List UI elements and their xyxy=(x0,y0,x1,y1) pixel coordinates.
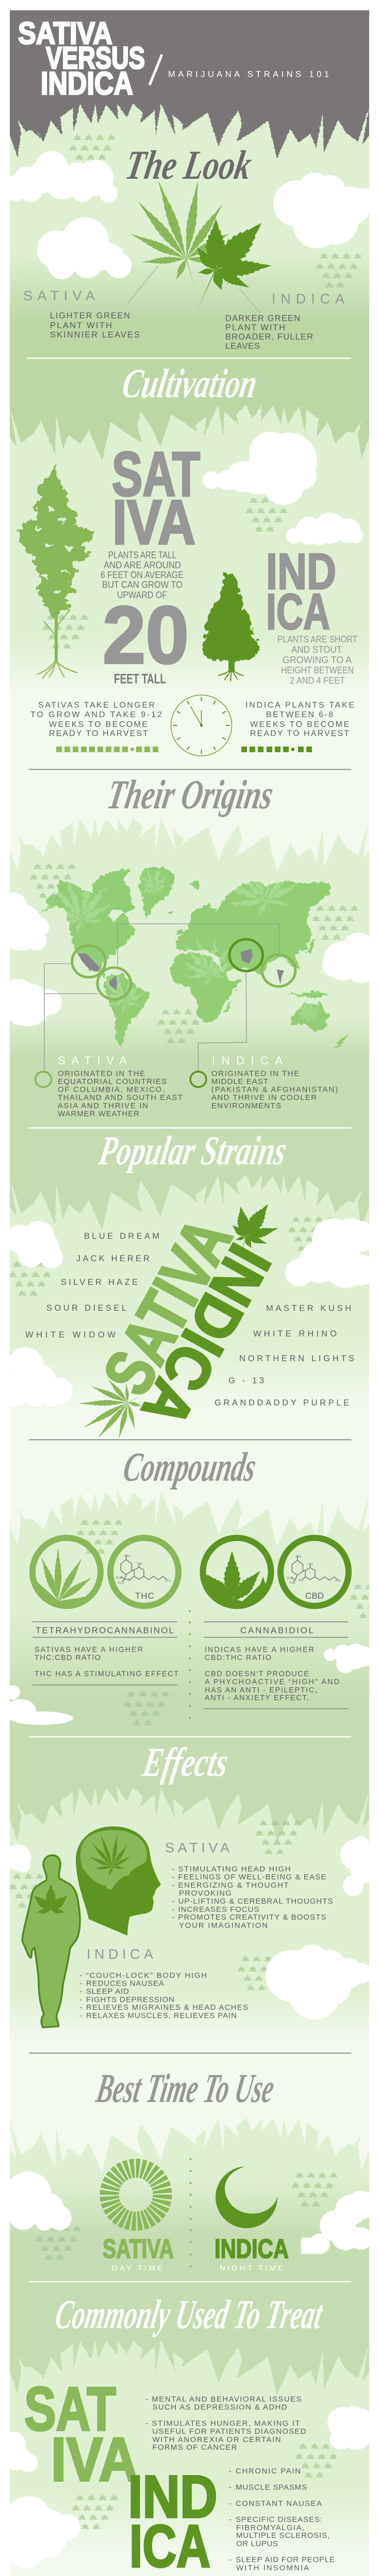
CBD column: CBD DOESN’T PRODUCE xyxy=(205,1670,309,1679)
sativa effects list: - xyxy=(172,1897,174,1906)
indica effects list xyxy=(79,1971,248,2020)
sativa treatment list: - xyxy=(145,2395,148,2404)
heading: compounds: Compounds xyxy=(120,1445,259,1490)
dotted divider xyxy=(190,2158,192,2267)
CBD column: CANNABIDIOL xyxy=(240,1625,314,1635)
label: indica origin: INDICA xyxy=(212,1054,283,1067)
THC column: THC HAS A STIMULATING EFFECT xyxy=(35,1670,178,1679)
indica treatment list: FIBROMYALGIA, xyxy=(236,2523,304,2532)
section: their origins xyxy=(35,772,348,1118)
icon: CBD molecule badge xyxy=(281,1538,349,1606)
CBD column: HAS AN ANTI - EPILEPTIC, xyxy=(205,1686,317,1694)
sativa harvest text: READY TO HARVEST xyxy=(49,730,148,738)
sativa strain list: JACK HERER xyxy=(76,1254,150,1263)
sativa treatment list: - xyxy=(145,2419,148,2428)
indica strain list: WHITE RHINO xyxy=(253,1329,337,1338)
label: sativa daytime: SATIVA xyxy=(103,2234,174,2264)
icon: indica leaf small xyxy=(226,1198,284,1263)
indica effects list: SLEEP AID xyxy=(86,1987,129,1996)
sativa description xyxy=(50,311,140,340)
icon: head with brain xyxy=(76,1826,161,1936)
connector lines xyxy=(44,924,279,1071)
sativa effects list: YOUR IMAGINATION xyxy=(179,1921,268,1930)
CBD column: INDICAS HAVE A HIGHER xyxy=(205,1646,314,1654)
sativa harvest text: WEEKS TO BECOME xyxy=(49,720,147,729)
sativa description: LIGHTER GREEN xyxy=(50,311,130,320)
icon: indica leaf badge xyxy=(202,1538,271,1610)
indica effects list: - xyxy=(79,2003,82,2012)
CBD column xyxy=(204,1622,348,1708)
indica effects list: - xyxy=(79,2011,82,2020)
big word indica: IND xyxy=(266,543,336,600)
CBD column: ANTI - ANXIETY EFFECT. xyxy=(205,1694,309,1702)
sativa height text: AND ARE AROUND xyxy=(104,560,181,570)
big word sativa: IVA xyxy=(51,2425,138,2494)
indica treatment list: SPECIFIC DISEASES: xyxy=(236,2515,322,2524)
sativa treatment list: SUCH AS DEPRESSION & ADHD xyxy=(153,2403,287,2412)
big word sativa xyxy=(112,439,200,557)
label: indica nighttime: INDICA xyxy=(215,2234,289,2264)
heading: their origins: Their Origins xyxy=(104,772,276,818)
big word indica: ICA xyxy=(266,583,330,640)
big word indica xyxy=(266,543,336,640)
legend markers xyxy=(35,1072,206,1087)
indica treatment list: WITH INSOMNIA xyxy=(236,2564,309,2572)
section: commonly used to treat xyxy=(24,2292,335,2576)
rotated indica word: INDICA xyxy=(128,1233,284,1438)
sativa description: SKINNIER LEAVES xyxy=(50,330,140,340)
sativa treatment list xyxy=(145,2395,306,2452)
indica treatment list: - xyxy=(229,2499,232,2508)
label: sativa effects: SATIVA xyxy=(165,1840,229,1856)
indica treatment list: CONSTANT NAUSEA xyxy=(236,2499,322,2508)
sativa height text: PLANTS ARE TALL xyxy=(108,550,176,561)
sativa height text: 6 FEET ON AVERAGE xyxy=(101,570,184,580)
indica effects list: RELIEVES MIGRAINES & HEAD ACHES xyxy=(86,2003,248,2012)
icon: THC molecule badge: CH₃ xyxy=(165,1579,171,1583)
indica origin text: ENVIRONMENTS xyxy=(211,1101,281,1110)
indica harvest text: INDICA PLANTS TAKE xyxy=(245,701,354,710)
icon: CBD molecule badge: CH₃ xyxy=(295,1555,302,1558)
sativa description: PLANT WITH xyxy=(50,321,112,330)
icon: THC molecule badge: CH₃ xyxy=(124,1554,130,1558)
big word indica xyxy=(128,2463,218,2576)
indica effects list: - xyxy=(79,1971,82,1980)
indica origin text: ORIGINATED IN THE xyxy=(211,1069,299,1078)
slash xyxy=(150,55,162,85)
indica treatment list: OR LUPUS xyxy=(236,2539,278,2548)
indica height text: GROWING TO A xyxy=(283,655,352,665)
heading: cultivation: Cultivation xyxy=(119,361,260,406)
heading: popular strains: Popular Strains xyxy=(95,1128,290,1174)
sativa origin text: WARMER WEATHER xyxy=(58,1110,139,1118)
indica origin text: (PAKISTAN & AFGHANISTAN) xyxy=(211,1086,338,1094)
sativa harvest text xyxy=(30,701,162,738)
icon: indica tree xyxy=(202,572,260,681)
sativa harvest text: TO GROW AND TAKE 9-12 xyxy=(30,710,162,719)
big word sativa: SAT xyxy=(112,439,200,509)
label: indica: INDICA xyxy=(272,291,344,307)
section: popular strains xyxy=(25,1128,354,1446)
icon: sun xyxy=(109,2168,162,2222)
icon: crescent moon xyxy=(216,2166,277,2228)
indica week squares xyxy=(241,747,312,752)
indica origin text xyxy=(211,1069,338,1110)
feet tall: FEET TALL xyxy=(114,671,166,686)
title: sativa: SATIVA xyxy=(18,16,112,50)
sativa origin text: THAILAND AND SOUTH EAST xyxy=(58,1093,183,1102)
indica effects list: - xyxy=(79,1979,82,1988)
sativa effects list: - xyxy=(172,1865,174,1874)
THC column xyxy=(32,1622,178,1685)
sativa strain list: SOUR DIESEL xyxy=(46,1303,126,1313)
icon: body xyxy=(22,1855,80,2027)
indica treatment list: - xyxy=(229,2483,232,2492)
indica description: DARKER GREEN xyxy=(225,314,300,323)
location rings xyxy=(72,939,295,999)
subtitle: MARIJUANA STRAINS 101 xyxy=(168,70,329,79)
section: the look xyxy=(23,143,344,351)
indica effects list: - xyxy=(79,1995,82,2004)
label: CBD: CBD xyxy=(305,1591,324,1601)
icon: sativa leaf xyxy=(129,179,232,286)
sativa strain list: SILVER HAZE xyxy=(61,1278,138,1287)
night time: NIGHT TIME xyxy=(220,2264,283,2273)
sativa effects list: INCREASES FOCUS xyxy=(178,1905,259,1914)
indica strain list: G - 13 xyxy=(228,1376,264,1385)
icon: CBD molecule badge: H₃C xyxy=(289,1581,295,1585)
indica origin text: AND THRIVE IN COOLER xyxy=(211,1093,317,1102)
THC column: SATIVAS HAVE A HIGHER xyxy=(35,1646,143,1654)
icon: THC molecule badge: H₃C xyxy=(116,1576,122,1580)
section: cultivation xyxy=(19,361,357,756)
sativa treatment list: STIMULATES HUNGER, MAKING IT xyxy=(152,2419,300,2428)
icon: THC molecule badge: H₃C xyxy=(118,1581,124,1585)
big number 20: 20 xyxy=(103,590,189,681)
indica harvest text: BETWEEN 6-8 xyxy=(266,710,333,719)
indica strain list xyxy=(215,1304,354,1408)
indica treatment list: SLEEP AID FOR PEOPLE xyxy=(236,2555,335,2564)
indica strain list: GRANDDADDY PURPLE xyxy=(215,1398,349,1408)
heading: effects: Effects xyxy=(139,1740,232,1785)
icon: CBD molecule badge: H₃C xyxy=(287,1577,293,1580)
icon: CBD molecule badge: HO xyxy=(298,1579,303,1582)
world map xyxy=(38,867,348,1071)
indica description: LEAVES xyxy=(225,342,260,351)
sativa effects list: FEELINGS OF WELL-BEING & EASE xyxy=(178,1873,326,1882)
sativa effects list xyxy=(172,1865,333,1930)
sativa height text xyxy=(101,550,184,600)
sativa harvest text: SATIVAS TAKE LONGER xyxy=(38,701,155,710)
indica origin text: MIDDLE EAST xyxy=(211,1077,268,1086)
indica height text: PLANTS ARE SHORT xyxy=(277,634,357,645)
section: best time to use xyxy=(93,2066,289,2273)
sativa effects list: UP-LIFTING & CEREBRAL THOUGHTS xyxy=(178,1897,333,1906)
indica strain list: NORTHERN LIGHTS xyxy=(239,1354,354,1363)
sativa effects list: - xyxy=(172,1913,174,1922)
sativa treatment list: FORMS OF CANCER xyxy=(153,2443,237,2452)
THC column: THC:CBD RATIO xyxy=(35,1654,101,1662)
indica height text: HEIGHT BETWEEN xyxy=(281,665,354,675)
sativa treatment list: USEFUL FOR PATIENTS DIAGNOSED xyxy=(153,2427,306,2436)
indica height text xyxy=(277,634,357,686)
indica height text: 2 AND 4 FEET xyxy=(290,675,345,686)
sativa effects list: PROVOKING xyxy=(179,1889,232,1898)
sativa strain list: BLUE DREAM xyxy=(84,1231,159,1241)
big word sativa: SAT xyxy=(24,2375,116,2444)
dotted divider xyxy=(189,1610,191,1719)
sativa effects list: - xyxy=(172,1873,174,1882)
rotated sativa word: SATIVA xyxy=(89,1206,246,1407)
indica description xyxy=(225,314,313,351)
indica treatment list: CHRONIC PAIN xyxy=(236,2467,301,2476)
sativa origin text: EQUATORIAL COUNTRIES xyxy=(58,1077,167,1086)
indica harvest text: WEEKS TO BECOME xyxy=(250,720,349,729)
indica effects list: RELAXES MUSCLES, RELIEVES PAIN xyxy=(86,2011,237,2020)
sativa effects list: PROMOTES CREATIVITY & BOOSTS xyxy=(178,1913,326,1922)
icon: THC molecule badge xyxy=(110,1538,178,1606)
indica treatment list xyxy=(229,2467,335,2572)
day time: DAY TIME xyxy=(112,2264,162,2273)
icon: CBD molecule badge: CH₃ xyxy=(335,1579,341,1583)
icon: indica leaf xyxy=(192,214,272,311)
icon: sativa tree xyxy=(19,464,94,679)
pointer lines xyxy=(128,266,261,314)
sativa effects list: - xyxy=(172,1881,174,1890)
indica description: BROADER, FULLER xyxy=(225,332,313,342)
icon: THC molecule badge: O xyxy=(128,1579,131,1582)
sativa strain list xyxy=(25,1231,159,1340)
label: indica effects: INDICA xyxy=(87,1946,153,1962)
label: sativa: SATIVA xyxy=(23,288,95,303)
indica effects list: FIGHTS DEPRESSION xyxy=(86,1995,174,2004)
sativa origin text: OF COLUMBIA, MEXICO, xyxy=(58,1086,164,1094)
icon: THC molecule badge: OH xyxy=(137,1562,142,1566)
indica treatment list: - xyxy=(229,2555,232,2564)
indica harvest text: READY TO HARVEST xyxy=(250,730,349,738)
label: THC: THC xyxy=(135,1591,154,1601)
sativa height text: UPWARD OF xyxy=(117,590,167,600)
indica height text: AND STOUT. xyxy=(291,645,343,655)
indica treatment list: - xyxy=(229,2467,232,2476)
indica treatment list: MULTIPLE SCLEROSIS, xyxy=(236,2531,329,2540)
indica effects list: “COUCH-LOCK” BODY HIGH xyxy=(86,1971,207,1980)
indica strain list: MASTER KUSH xyxy=(266,1304,351,1313)
icon: sativa leaf small xyxy=(74,1372,151,1446)
indica effects list: REDUCES NAUSEA xyxy=(86,1979,164,1988)
sativa effects list: ENERGIZING & THOUGHT xyxy=(178,1881,289,1890)
section: effects xyxy=(22,1740,333,2027)
title block xyxy=(18,16,329,101)
indica description: PLANT WITH xyxy=(225,323,285,332)
heading: the look: The Look xyxy=(122,143,255,188)
CBD column: A PHYCHOACTIVE “HIGH” AND xyxy=(205,1678,339,1686)
title: indica: INDICA xyxy=(41,66,133,101)
indica harvest text xyxy=(245,701,354,738)
highlighted countries xyxy=(77,948,284,990)
sativa origin text xyxy=(58,1069,183,1118)
sativa strain list: WHITE WIDOW xyxy=(25,1330,116,1340)
CBD column: CBD:THC RATIO xyxy=(205,1654,271,1662)
sativa height text: BUT CAN GROW TO xyxy=(102,580,183,590)
indica effects list: - xyxy=(79,1987,82,1996)
title: versus: VERSUS xyxy=(46,41,145,75)
label: sativa origin: SATIVA xyxy=(58,1054,127,1067)
indica treatment list: - xyxy=(229,2515,232,2524)
icon: sativa leaf badge xyxy=(32,1538,101,1610)
sativa treatment list: MENTAL AND BEHAVIORAL ISSUES xyxy=(152,2395,301,2404)
sativa origin text: ORIGINATED IN THE xyxy=(58,1069,145,1078)
big word indica: IND xyxy=(128,2463,218,2530)
sativa effects list: - xyxy=(172,1905,174,1914)
sativa effects list: STIMULATING HEAD HIGH xyxy=(178,1865,291,1874)
THC column: TETRAHYDROCANNABINOL xyxy=(36,1625,174,1635)
sativa treatment list: WITH ANOREXIA OR CERTAIN xyxy=(153,2435,281,2444)
icon: CBD molecule badge: OH xyxy=(308,1563,313,1566)
indica treatment list: MUSCLE SPASMS xyxy=(236,2483,307,2492)
sativa origin text: ASIA AND THRIVE IN xyxy=(58,1101,148,1110)
big word sativa xyxy=(24,2375,138,2494)
big word sativa: IVA xyxy=(112,487,195,557)
section: compounds xyxy=(32,1445,349,1719)
icon: clock xyxy=(171,695,232,756)
sativa week squares xyxy=(56,747,158,752)
